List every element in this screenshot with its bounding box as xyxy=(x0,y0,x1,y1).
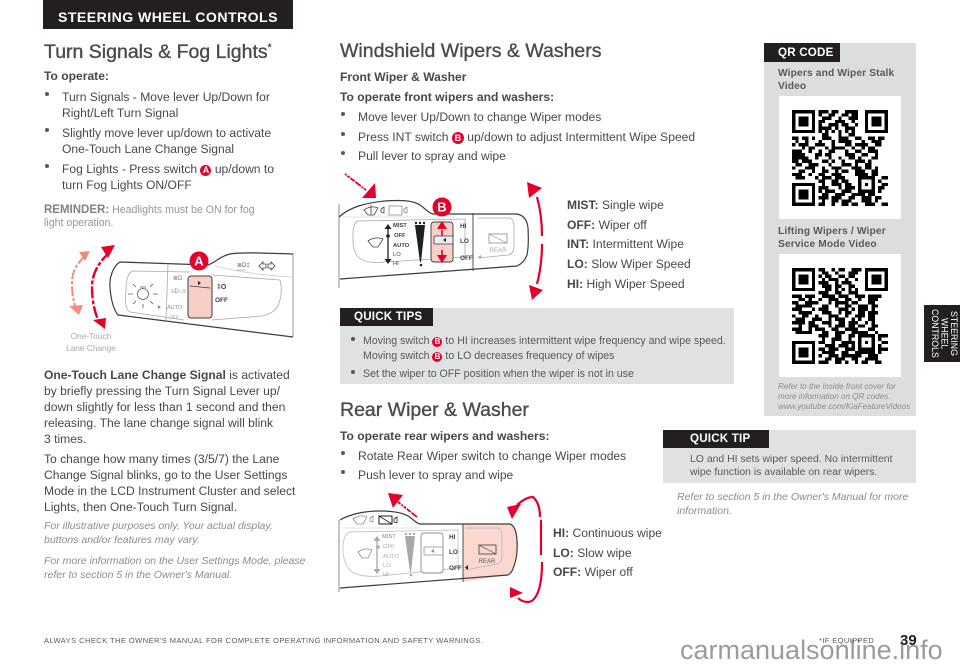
switch position labels: LO xyxy=(460,238,469,245)
qr title 1: Wipers and Wiper Stalk xyxy=(778,68,894,79)
qr title 1 xyxy=(778,68,894,92)
tips text: B xyxy=(435,337,440,346)
caption: one-touch lane change: One-Touch xyxy=(71,331,111,341)
text block: lane change signal: One-Touch Lane Change Signal is activated xyxy=(44,368,290,382)
switch position labels: OFF xyxy=(449,565,462,572)
light position labels: OFF xyxy=(215,297,228,304)
wiper mode scale: MIST xyxy=(382,534,396,540)
legend: rear wiper modes xyxy=(553,526,662,579)
footnote: *IF EQUIPPED xyxy=(819,636,874,645)
badge A xyxy=(190,252,208,270)
tip text xyxy=(690,454,892,478)
switch position labels xyxy=(449,534,468,572)
light position labels: ≡D○≡ xyxy=(171,289,186,295)
qr title 2 xyxy=(778,226,886,250)
arrow: rear switch rotation xyxy=(507,497,542,602)
disclaimer notes: For more information on the User Settings Mode, please xyxy=(44,555,305,567)
tips text: Set the wiper to OFF position when the wiper is not in use xyxy=(363,368,634,380)
wiper mode scale: LO xyxy=(393,252,401,258)
text block: to operate turn signals: One-Touch Lane Change Signal xyxy=(62,142,234,156)
wiper mode scale: OFF xyxy=(383,544,395,550)
intermittent switch xyxy=(421,533,443,573)
tag: qr code xyxy=(764,43,840,62)
wiper mode scale: HI xyxy=(393,261,399,267)
caption: one-touch lane change xyxy=(66,331,116,353)
legend: rear wiper modes: HI: Continuous wipe xyxy=(553,526,662,540)
intermittent speed wedge xyxy=(405,533,415,576)
illustration: turn signal stalk xyxy=(69,245,294,338)
legend: front wiper modes: OFF: Wiper off xyxy=(567,218,647,232)
text block: front wiper instructions: Front Wiper & Washer xyxy=(340,70,466,84)
text block: to operate turn signals: Slightly move lever up/down to activate xyxy=(62,126,271,140)
arrow: one-touch lane change xyxy=(69,251,90,315)
wiper mode scale: LO xyxy=(383,563,391,569)
intermittent switch highlight xyxy=(431,221,453,263)
legend: front wiper modes xyxy=(567,198,691,291)
text block: rear wiper instructions: Push lever to spray and wipe xyxy=(358,468,513,482)
text block: lane change signal: down slightly for less than 1 second and then xyxy=(44,400,285,414)
text block: to operate turn signals: Turn Signals - Move lever Up/Down for xyxy=(62,90,270,104)
rear wiper label: REAR xyxy=(490,248,507,254)
light position labels: AUTO xyxy=(237,268,246,272)
badge B xyxy=(432,198,452,216)
tag: quick tip xyxy=(663,430,769,448)
illustration: rear wiper stalk xyxy=(338,493,544,604)
reminder note: REMINDER: Headlights must be ON for fog xyxy=(44,204,255,216)
text block: lane change signal: Mode in the LCD Instrument Cluster and select xyxy=(44,484,295,498)
qr note xyxy=(778,382,910,411)
text block: front wiper instructions: Move lever Up/Down to change Wiper modes xyxy=(358,110,601,124)
legend: front wiper modes: MIST: Single wipe xyxy=(567,198,664,212)
heading: turn signals: Turn Signals & Fog Lights* xyxy=(44,41,272,63)
disclaimer notes: For illustrative purposes only. Your actual display, xyxy=(44,520,273,532)
tips text xyxy=(351,335,726,380)
side tab label xyxy=(930,309,959,358)
text block: rear wiper instructions: Rotate Rear Wiper switch to change Wiper modes xyxy=(358,448,626,462)
side tab label: CONTROLS xyxy=(930,309,940,358)
intermittent speed wedge xyxy=(415,222,425,266)
wiper mode scale xyxy=(384,223,410,267)
badge B: B xyxy=(437,200,447,214)
arrow: lever up/down xyxy=(527,182,543,300)
text block: front wiper instructions xyxy=(340,70,695,163)
panel: quick tip xyxy=(663,430,916,483)
switch position labels: OFF xyxy=(460,255,473,262)
wiper icons xyxy=(364,205,407,247)
text block: rear wiper instructions: To operate rear wipers and washers: xyxy=(340,429,549,443)
text block: rear wiper instructions xyxy=(340,429,626,482)
text block: front wiper instructions: B xyxy=(455,132,461,142)
qr note: Refer to the inside front cover for xyxy=(778,382,896,391)
switch position labels: LO xyxy=(449,549,458,556)
side tab label: STEERING xyxy=(949,311,959,356)
heading: rear wiper: Rear Wiper & Washer xyxy=(340,399,529,421)
arrow: washer pull xyxy=(345,174,376,198)
tip text: wipe function is available on rear wipers. xyxy=(690,467,877,478)
manual reference note: information. xyxy=(677,504,732,516)
light position labels: ≣D xyxy=(173,273,183,282)
tips text: Moving switch to LO decreases frequency of wipes xyxy=(363,350,614,362)
switch position labels xyxy=(460,223,481,262)
switch position labels: HI xyxy=(460,223,467,230)
text block: to operate turn signals xyxy=(44,69,274,192)
reminder note: light operation. xyxy=(44,217,114,229)
tag: quick tips xyxy=(340,308,433,326)
wiper mode scale: MIST xyxy=(393,223,407,229)
text block: lane change signal: releasing. The lane change signal will blink xyxy=(44,416,273,430)
reminder note xyxy=(44,204,255,229)
light position labels xyxy=(158,260,275,321)
text block: lane change signal: To change how many times (3/5/7) the Lane xyxy=(44,452,279,466)
headlamp icon xyxy=(128,284,158,308)
legend: front wiper modes: HI: High Wiper Speed xyxy=(567,277,685,291)
page number: 39 xyxy=(900,632,917,649)
qr title 2: Lifting Wipers / Wiper xyxy=(778,226,886,237)
light position labels: AUTO xyxy=(167,305,183,311)
footer warning: ALWAYS CHECK THE OWNER'S MANUAL FOR COMPLETE OPERATING INFORMATION AND SAFETY WARNINGS. xyxy=(44,636,483,645)
panel: quick tips xyxy=(340,308,734,384)
manual reference note xyxy=(677,491,908,516)
disclaimer notes: refer to section 5 in the Owner's Manual. xyxy=(44,568,232,580)
rear wiper label xyxy=(489,234,507,254)
header banner: STEERING WHEEL CONTROLS xyxy=(58,9,278,25)
text block: lane change signal xyxy=(44,368,296,514)
tag: qr code: QR CODE xyxy=(778,46,834,59)
qr note: www.youtube.com/KiaFeatureVideos xyxy=(778,402,910,411)
caption: one-touch lane change: Lane Change xyxy=(66,343,116,353)
qr code 2 xyxy=(779,254,901,377)
tag: quick tips: QUICK TIPS xyxy=(354,310,422,323)
tag: quick tip: QUICK TIP xyxy=(690,432,750,445)
text block: lane change signal: Lights, then One-Touch Turn Signal. xyxy=(44,500,237,514)
stalk outline xyxy=(339,200,528,288)
heading: windshield wipers: Windshield Wipers & Washers xyxy=(340,40,602,62)
legend: front wiper modes: LO: Slow Wiper Speed xyxy=(567,257,691,271)
light position labels: ‡O xyxy=(217,284,227,291)
illustration: front wiper stalk xyxy=(338,173,544,300)
badge A: A xyxy=(194,254,204,268)
qr code 1 xyxy=(779,96,901,219)
manual reference note: Refer to section 5 in the Owner's Manual for more xyxy=(677,491,908,503)
rear wiper label: REAR xyxy=(479,559,496,565)
text block: front wiper instructions: Pull lever to spray and wipe xyxy=(358,149,506,163)
tip text: LO and HI sets wiper speed. No intermittent xyxy=(690,454,892,465)
text block: front wiper instructions: To operate front wipers and washers: xyxy=(340,90,554,104)
wiper mode scale: AUTO xyxy=(383,554,399,560)
side tab label: WHEEL xyxy=(940,318,950,349)
wiper mode scale: HI xyxy=(383,572,389,578)
wiper icons xyxy=(353,516,397,558)
light position labels: OFF xyxy=(169,315,179,321)
rear wiper label xyxy=(479,545,496,565)
rear highlight xyxy=(463,524,517,582)
wiper mode scale: AUTO xyxy=(393,243,410,249)
tips text: B xyxy=(435,352,440,361)
disclaimer notes xyxy=(44,520,306,580)
qr note: more information on QR codes. xyxy=(778,392,890,401)
watermark: carmanualsonline.info xyxy=(680,635,943,665)
text block: lane change signal: 3 times. xyxy=(44,432,86,446)
legend: front wiper modes: INT: Intermittent Wipe xyxy=(567,237,684,251)
text block: front wiper instructions: Press INT switch up/down to adjust Intermittent Wipe Speed xyxy=(358,130,695,144)
side tab xyxy=(924,305,960,362)
light position labels: ≣D‡ xyxy=(237,260,250,269)
text block: lane change signal: Change Signal blinks, go to the User Settings xyxy=(44,468,287,482)
legend: rear wiper modes: OFF: Wiper off xyxy=(553,565,633,579)
qr title 2: Service Mode Video xyxy=(778,239,877,250)
text block: to operate turn signals: turn Fog Lights ON/OFF xyxy=(62,178,192,192)
stalk outline xyxy=(110,253,293,337)
legend: rear wiper modes: LO: Slow wipe xyxy=(553,546,632,560)
fog switch highlight xyxy=(188,276,212,318)
disclaimer notes: buttons and/or features may vary. xyxy=(44,534,200,546)
text block: lane change signal: by briefly pressing the Turn Signal Lever up/ xyxy=(44,384,280,398)
header banner xyxy=(43,0,293,29)
stalk outline xyxy=(339,511,517,592)
wiper mode scale: OFF xyxy=(394,233,406,239)
switch position labels: HI xyxy=(449,534,456,541)
wiper mode scale xyxy=(374,534,399,578)
panel: qr codes xyxy=(764,43,916,416)
arrow: turn signal up/down xyxy=(92,245,115,329)
arrow: washer push xyxy=(388,493,417,517)
text block: to operate turn signals: To operate: xyxy=(44,69,109,83)
tips text: Moving switch to HI increases intermittent wipe frequency and wipe speed. xyxy=(363,335,726,347)
qr title 1: Video xyxy=(778,81,806,92)
text block: to operate turn signals: Fog Lights - Press switch up/down to xyxy=(62,162,274,176)
text block: to operate turn signals: Right/Left Turn Signal xyxy=(62,106,178,120)
text block: to operate turn signals: A xyxy=(203,165,209,175)
